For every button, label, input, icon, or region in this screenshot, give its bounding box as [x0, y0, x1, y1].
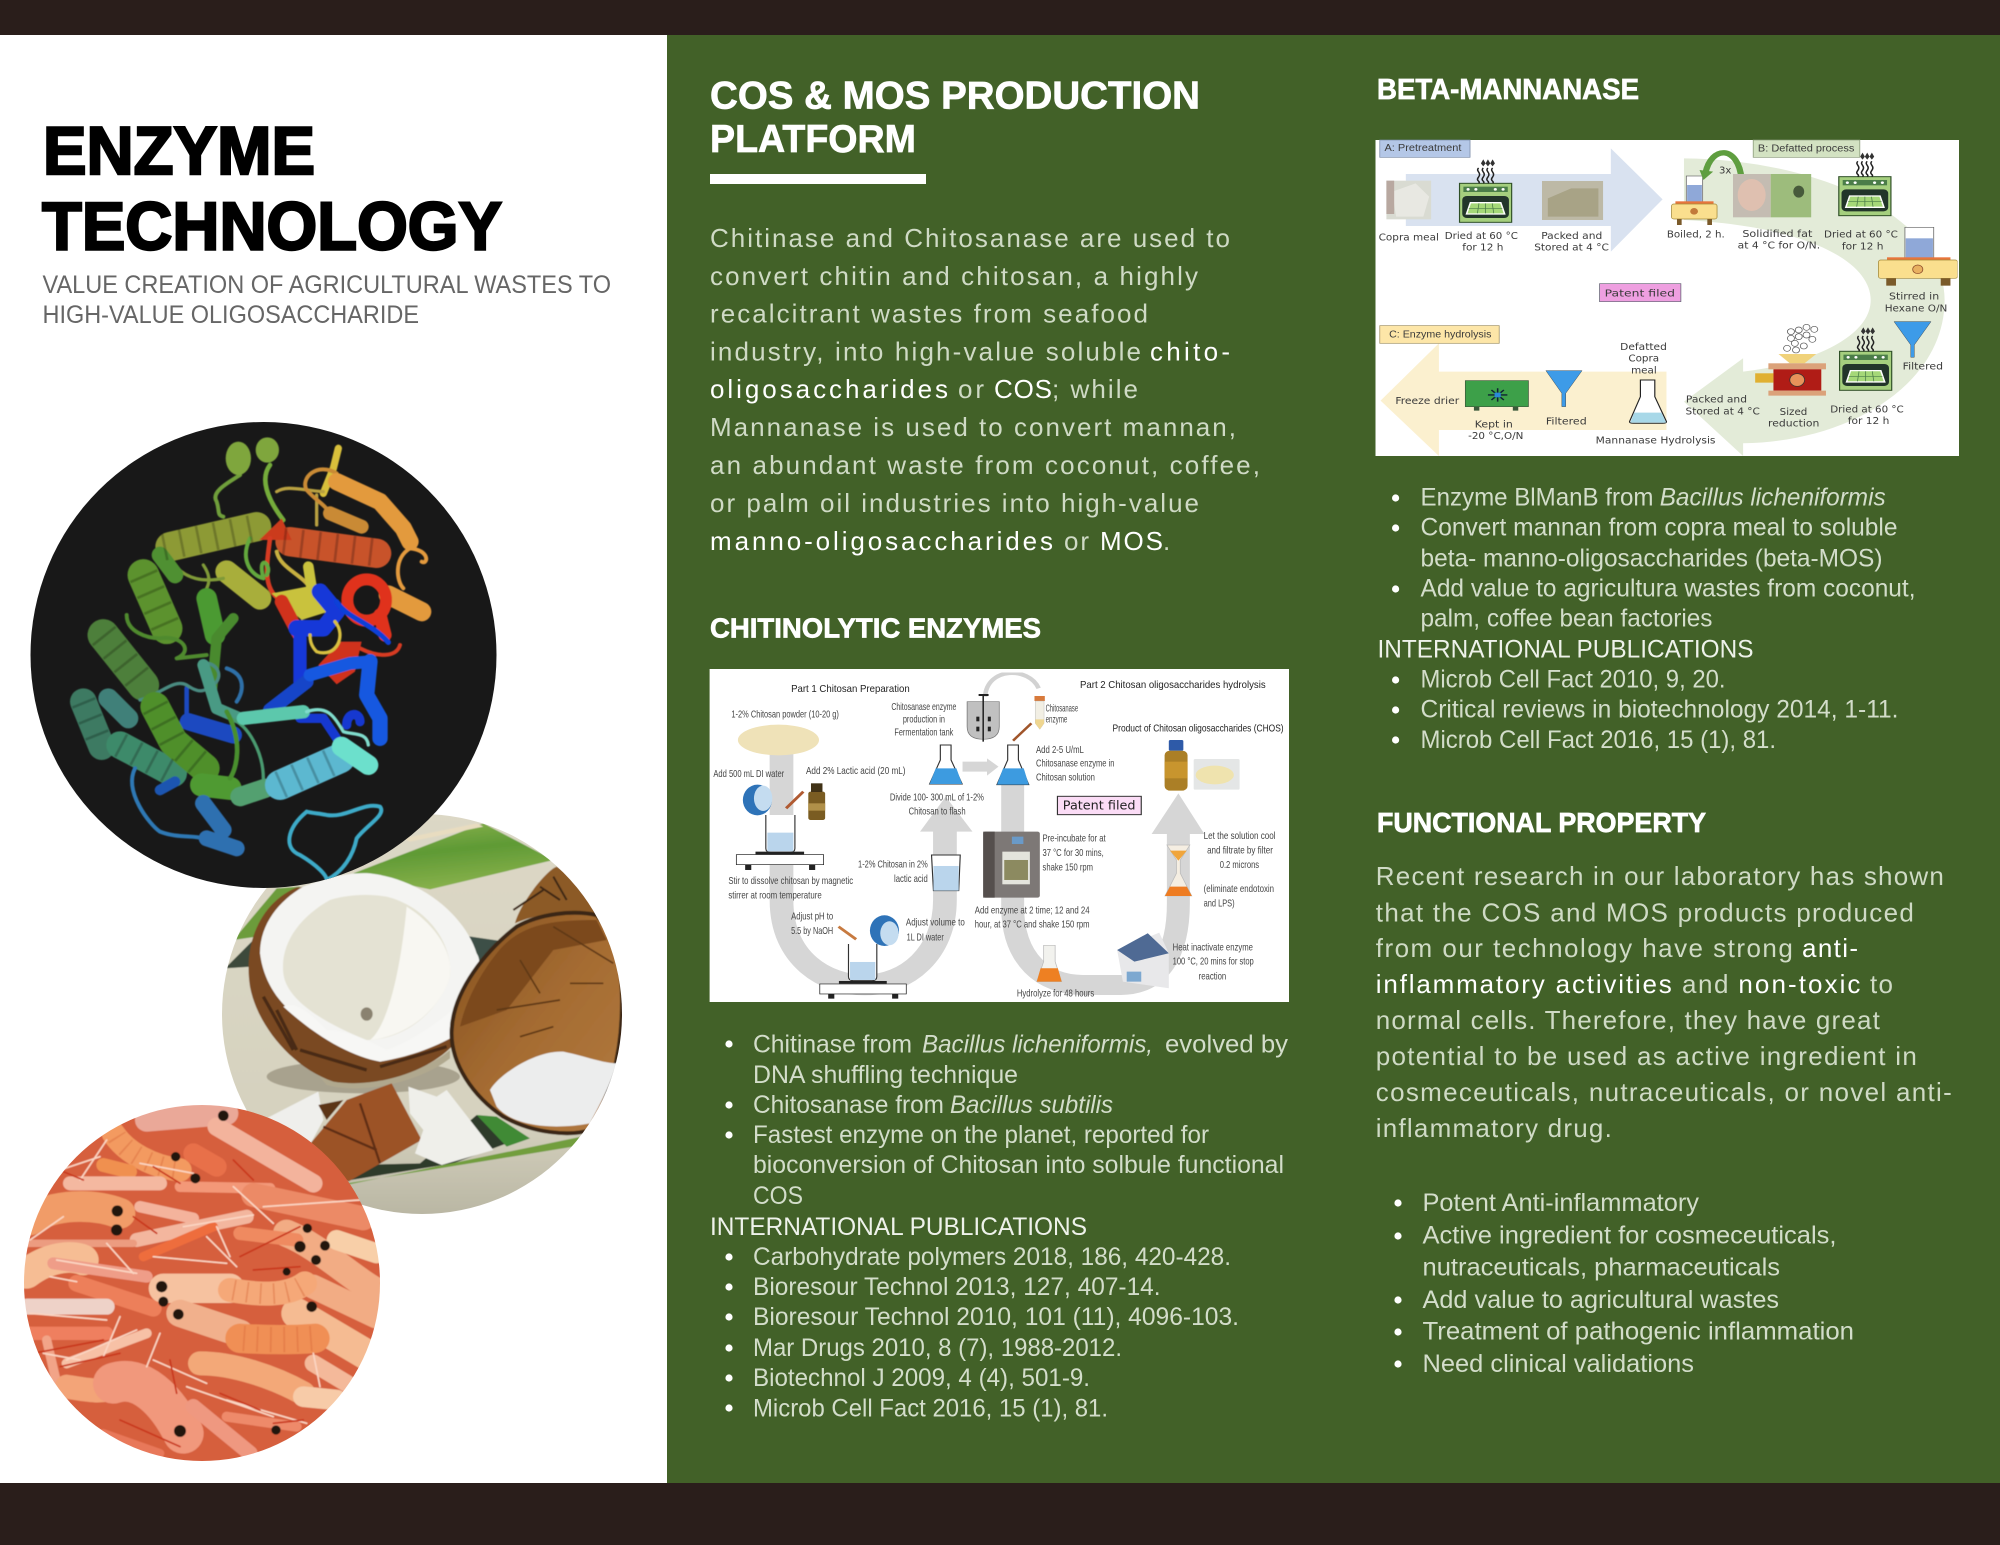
- text block: intro paragraph: an abundant waste from coconut, coffee,: [710, 450, 1260, 480]
- text block: intro paragraph: or palm oil industries into high-value: [710, 488, 1199, 518]
- icon: fermentation tank: [967, 694, 999, 742]
- icon: flask hydrolysis: [1630, 380, 1666, 423]
- icon: boiling setup: [1672, 176, 1717, 225]
- diagram: mannanase process: [1376, 140, 1959, 456]
- title: ENZYME: [43, 113, 315, 189]
- label: A pretreatment: [1380, 140, 1470, 157]
- icon: amber bottle and product: [1165, 740, 1240, 791]
- icon: enzyme tube: [1013, 696, 1045, 741]
- bullets: [725, 1040, 733, 1412]
- list lines: palm, coffee bean factories: [1420, 605, 1712, 633]
- text block: intro paragraph: Chitinase and Chitosanase are used to: [710, 223, 1230, 253]
- title: [42, 113, 502, 264]
- icon: orange flask: [1037, 945, 1062, 982]
- diagram labels: 1-2% Chitosan in 2%: [858, 859, 928, 870]
- bullets: [1392, 494, 1399, 744]
- arrow: part 1 U flow: [782, 750, 972, 985]
- label: A pretreatment: A: Pretreatment: [1384, 143, 1461, 154]
- diagram labels: (eliminate endotoxin: [1204, 884, 1274, 895]
- list lines: Chitinase from: [753, 1031, 912, 1059]
- diagram labels: Filtered: [1546, 415, 1587, 427]
- label: B defatted process: B: Defatted process: [1758, 143, 1855, 154]
- diagram labels: for 12 h: [1848, 415, 1889, 427]
- panel: title block: [42, 113, 611, 329]
- heading: beta-mannanase: BETA-MANNANASE: [1377, 74, 1639, 106]
- diagram labels: Stored at 4 °C: [1534, 241, 1609, 253]
- text block: intro paragraph: MOS: [1100, 526, 1163, 556]
- diagram labels: Dried at 60 °C: [1445, 230, 1518, 242]
- list lines: Microb Cell Fact 2010, 9, 20.: [1420, 666, 1726, 694]
- text block: functional paragraph: inflammatory activities: [1376, 969, 1672, 999]
- diagram labels: for 12 h: [1842, 240, 1884, 252]
- text block: functional paragraph: anti-: [1802, 933, 1858, 963]
- diagram labels: Chitosanase enzyme: [891, 702, 956, 713]
- text block: functional paragraph: that the COS and MOS products produced: [1376, 897, 1914, 927]
- text block: chitinase publications: Bioresour Technol 2010, 101 (11), 4096-103.: [753, 1303, 1239, 1331]
- text block: intro paragraph: [710, 223, 1260, 556]
- icon: beaker on stirrer lower: [820, 915, 906, 999]
- diagram labels: at 4 °C for O/N.: [1738, 239, 1820, 251]
- diagram labels: Heat inactivate enzyme: [1173, 942, 1253, 953]
- text block: chitinase publications: [753, 1243, 1239, 1423]
- diagram labels: Hexane O/N: [1885, 302, 1947, 314]
- text block: chitinase bullet list: [725, 1031, 1289, 1412]
- icon: orange filter flask: [1165, 845, 1192, 896]
- text block: functional paragraph: to: [1870, 969, 1893, 999]
- diagram labels: Packed and: [1541, 230, 1602, 242]
- diagram labels: 0.2 microns: [1220, 860, 1259, 871]
- panel: right column: [1376, 74, 1959, 1378]
- arrow: defatted process: [1684, 158, 1945, 456]
- photo: packed meal: [1542, 181, 1603, 220]
- bottom dark band: [0, 1483, 2000, 1545]
- bullets: [1394, 1199, 1402, 1368]
- diagram labels: reduction: [1768, 417, 1819, 429]
- list lines: Add value to agricultura wastes from coconut,: [1420, 575, 1916, 603]
- title: TECHNOLOGY: [42, 188, 502, 264]
- text block: intro paragraph: convert chitin and chitosan, a highly: [710, 261, 1198, 291]
- diagram labels: Dried at 60 °C: [1824, 228, 1898, 240]
- callout: patent filed: Patent filed: [1605, 287, 1675, 299]
- diagram labels: Copra: [1628, 352, 1659, 364]
- list lines: [753, 1031, 1289, 1210]
- diagram labels: Kept in: [1475, 418, 1513, 430]
- diagram labels: meal: [1631, 364, 1657, 376]
- white left panel background: [0, 0, 667, 1545]
- heading: international publications: INTERNATIONAL PUBLICATIONS: [710, 1213, 1087, 1241]
- label: C enzyme hydrolysis: C: Enzyme hydrolysis: [1389, 329, 1492, 340]
- list lines: evolved by: [1165, 1031, 1289, 1059]
- diagram labels: Filtered: [1903, 360, 1943, 372]
- text block: chitinase publications: Microb Cell Fact 2016, 15 (1), 81.: [753, 1395, 1108, 1423]
- diagram labels: 37 °C for 30 mins,: [1043, 848, 1104, 859]
- arrow: 3x repeat: 3x: [1719, 164, 1732, 176]
- text block: intro paragraph: .: [1163, 526, 1170, 556]
- list lines: COS: [753, 1182, 803, 1210]
- text block: chitinase publications: Bioresour Technol 2013, 127, 407-14.: [753, 1273, 1161, 1301]
- list lines: Need clinical validations: [1422, 1350, 1694, 1378]
- list lines: Fastest enzyme on the planet, reported for: [753, 1121, 1209, 1149]
- list lines: [1378, 484, 1916, 754]
- list lines: Convert mannan from copra meal to soluble: [1420, 514, 1898, 542]
- icon: pouring cup: [743, 785, 772, 815]
- diagram labels: Add enzyme at 2 time; 12 and 24: [975, 905, 1090, 916]
- diagram labels: hour, at 37 °C and shake 150 rpm: [975, 919, 1090, 930]
- text block: functional bullet list: [1394, 1189, 1854, 1378]
- list lines: [1422, 1189, 1854, 1378]
- icon: incubator: [983, 832, 1040, 898]
- text block: functional paragraph: Recent research in our laboratory has shown: [1376, 861, 1944, 891]
- heading: chitinolytic enzymes: CHITINOLYTIC ENZYMES: [710, 612, 1041, 644]
- photo: shrimp circle: [20, 1100, 387, 1467]
- diagram labels: Stored at 4 °C: [1686, 405, 1760, 417]
- icon: flasks: [930, 745, 1029, 785]
- diagram labels: [1379, 228, 1947, 446]
- diagram labels: 1L DI water: [907, 932, 944, 943]
- photo: protein structure circle: [30, 422, 496, 890]
- diagram labels: 100 °C, 20 mins for stop: [1173, 956, 1254, 967]
- icon: stirrer with hexane: [1878, 227, 1957, 286]
- diagram labels: Copra meal: [1379, 231, 1439, 243]
- text block: intro paragraph: Mannanase is used to convert mannan,: [710, 412, 1236, 442]
- text block: chitinase publications: Carbohydrate polymers 2018, 186, 420-428.: [753, 1243, 1231, 1271]
- text block: functional paragraph: and: [1682, 969, 1728, 999]
- text block: chitinase publications: Mar Drugs 2010, 8 (7), 1988-2012.: [753, 1334, 1122, 1362]
- list lines: Chitosanase from: [753, 1091, 944, 1119]
- diagram labels: Divide 100- 300 mL of 1-2%: [890, 792, 984, 803]
- text block: functional paragraph: non-toxic: [1738, 969, 1860, 999]
- text block: functional paragraph: normal cells. Therefore, they have great: [1376, 1005, 1881, 1035]
- heading: COS & MOS production platform: [710, 74, 1200, 161]
- text block: intro paragraph: industry, into high-value soluble: [710, 336, 1141, 366]
- diagram labels: Freeze drier: [1395, 395, 1460, 407]
- heading: functional property: FUNCTIONAL PROPERTY: [1377, 807, 1706, 838]
- diagram labels: Let the solution cool: [1204, 831, 1276, 842]
- list lines: Microb Cell Fact 2016, 15 (1), 81.: [1420, 726, 1776, 754]
- photo: solidified fat: [1733, 174, 1811, 217]
- icon: dropper: [786, 792, 803, 808]
- diagram labels: stirrer at room temperature: [728, 890, 822, 901]
- top dark band: [0, 0, 2000, 35]
- diagram labels: Hydrolyze for 48 hours: [1017, 988, 1094, 999]
- diagram labels: for 12 h: [1462, 241, 1503, 253]
- icon: freezer: [1465, 381, 1528, 411]
- diagram labels: [713, 680, 1284, 999]
- text block: functional paragraph: inflammatory drug.: [1376, 1113, 1612, 1143]
- diagram: chitosan oligosaccharide process: [710, 669, 1289, 1002]
- diagram labels: Product of Chitosan oligosaccharides (CHOS): [1113, 723, 1284, 734]
- icon: grinder: [1755, 324, 1826, 396]
- text block: functional paragraph: cosmeceuticals, nutraceuticals, or novel anti-: [1376, 1077, 1952, 1107]
- heading underline bar: [710, 174, 926, 184]
- subtitle: [42, 271, 611, 329]
- text block: intro paragraph: or: [958, 374, 984, 404]
- heading: COS & MOS production platform: PLATFORM: [710, 118, 916, 161]
- icon: beaker with lactic acid: [932, 855, 960, 891]
- diagram labels: Add 2-5 U/mL: [1036, 745, 1084, 756]
- list lines: Potent Anti-inflammatory: [1422, 1189, 1700, 1217]
- icon: oven 2: [1839, 153, 1891, 216]
- text block: intro paragraph: or: [1064, 526, 1089, 556]
- subtitle: VALUE CREATION OF AGRICULTURAL WASTES TO: [42, 271, 611, 299]
- diagram labels: Add 2% Lactic acid (20 mL): [806, 766, 906, 777]
- list lines: nutraceuticals, pharmaceuticals: [1422, 1254, 1780, 1282]
- diagram labels: Chitosanase enzyme in: [1036, 758, 1114, 769]
- list lines: DNA shuffling technique: [753, 1061, 1018, 1089]
- list lines: Enzyme BlManB from: [1420, 484, 1654, 512]
- diagram labels: Part 2 Chitosan oligosaccharides hydrolysis: [1080, 680, 1266, 691]
- diagram labels: Adjust pH to: [791, 911, 833, 922]
- diagram labels: 1-2% Chitosan powder (10-20 g): [731, 709, 839, 720]
- text block: functional paragraph: from our technology have strong: [1376, 933, 1793, 963]
- icon: lactic acid bottle: [808, 783, 825, 820]
- text block: intro paragraph: chito-: [1150, 336, 1230, 366]
- diagram labels: Chitosan solution: [1036, 772, 1095, 783]
- text block: functional paragraph: [1376, 861, 1952, 1143]
- icon: beaker on stirrer: [736, 815, 824, 870]
- label: B defatted process: [1753, 140, 1860, 157]
- diagram labels: Chitosanase: [1046, 703, 1078, 714]
- arrow: 3x repeat: [1700, 153, 1742, 180]
- diagram labels: Stir to dissolve chitosan by magnetic: [728, 876, 854, 887]
- icon: water bath: [1117, 933, 1169, 988]
- diagram labels: Sized: [1780, 406, 1807, 418]
- label: C enzyme hydrolysis: [1380, 326, 1499, 343]
- diagram labels: and filtrate by filter: [1207, 845, 1273, 856]
- list lines: Treatment of pathogenic inflammation: [1422, 1318, 1854, 1346]
- diagram labels: Solidified fat: [1742, 228, 1812, 240]
- diagram labels: and LPS): [1204, 898, 1235, 909]
- list lines: Add value to agricultural wastes: [1422, 1286, 1779, 1314]
- icon: funnel left: [1546, 371, 1582, 407]
- photo: copra meal: [1386, 181, 1431, 219]
- diagram labels: reaction: [1199, 971, 1226, 982]
- icon: funnel right: [1894, 322, 1931, 357]
- list lines: Active ingredient for cosmeceuticals,: [1422, 1222, 1836, 1250]
- text block: mannanase bullet list: [1378, 484, 1916, 754]
- arrow: enzyme hydrolysis: [1381, 343, 1666, 456]
- diagram labels: 5.5 by NaOH: [791, 926, 833, 937]
- text block: intro paragraph: ; while: [1052, 374, 1138, 404]
- icon: chitosan powder: [738, 725, 819, 755]
- diagram labels: Defatted: [1620, 341, 1667, 353]
- arrow: flask to flask: [963, 758, 999, 776]
- text block: intro paragraph: COS: [994, 374, 1052, 404]
- icon: oven 1: [1460, 159, 1512, 222]
- diagram labels: Add 500 mL DI water: [713, 769, 784, 780]
- photo: coconut circle: [220, 810, 627, 1220]
- list lines: bioconversion of Chitosan into solbule functional: [753, 1151, 1284, 1179]
- text block: chitinase publications: Biotechnol J 2009, 4 (4), 501-9.: [753, 1364, 1090, 1392]
- diagram labels: Chitosan to flash: [909, 806, 966, 817]
- list lines: Bacillus subtilis: [950, 1091, 1113, 1119]
- icon: oven 3: [1840, 327, 1892, 390]
- diagram labels: Dried at 60 °C: [1830, 403, 1904, 415]
- arrow: part 2 U flow: [1013, 785, 1204, 985]
- list lines: Critical reviews in biotechnology 2014, 1-11.: [1420, 696, 1898, 724]
- list lines: INTERNATIONAL PUBLICATIONS: [1378, 636, 1754, 664]
- diagram labels: Packed and: [1686, 393, 1747, 405]
- list lines: beta- manno-oligosaccharides (beta-MOS): [1420, 545, 1882, 573]
- arrow: curved top: [985, 673, 1039, 697]
- text block: functional paragraph: potential to be used as active ingredient in: [1376, 1041, 1917, 1071]
- text block: intro paragraph: oligosaccharides: [710, 374, 948, 404]
- diagram labels: -20 °C,O/N: [1468, 430, 1523, 442]
- diagram labels: Boiled, 2 h.: [1667, 228, 1725, 240]
- text block: intro paragraph: manno-oligosaccharides: [710, 526, 1053, 556]
- callout: patent filed: Patent filed: [1063, 799, 1136, 813]
- arrow: pretreatment: [1406, 148, 1663, 252]
- diagram labels: Part 1 Chitosan Preparation: [791, 684, 910, 695]
- text block: intro paragraph: recalcitrant wastes from seafood: [710, 298, 1148, 328]
- diagram labels: production in: [903, 714, 945, 725]
- subtitle: HIGH-VALUE OLIGOSACCHARIDE: [42, 301, 419, 329]
- diagram labels: Mannanase Hydrolysis: [1596, 434, 1716, 446]
- diagram labels: Pre-incubate for at: [1043, 833, 1106, 844]
- list lines: Bacillus licheniformis,: [922, 1031, 1153, 1059]
- diagram labels: Stirred in: [1889, 290, 1939, 302]
- diagram labels: lactic acid: [894, 874, 928, 885]
- heading: COS & MOS production platform: COS & MOS PRODUCTION: [710, 74, 1200, 118]
- green content panel background: [667, 35, 2000, 1483]
- panel: middle column: [710, 74, 1289, 1423]
- list lines: Bacillus licheniformis: [1660, 484, 1886, 512]
- diagram labels: shake 150 rpm: [1043, 862, 1093, 873]
- callout: patent filed: [1600, 284, 1681, 302]
- diagram labels: enzyme: [1046, 714, 1067, 725]
- diagram labels: Fermentation tank: [894, 727, 954, 738]
- diagram labels: Adjust volume to: [906, 917, 965, 928]
